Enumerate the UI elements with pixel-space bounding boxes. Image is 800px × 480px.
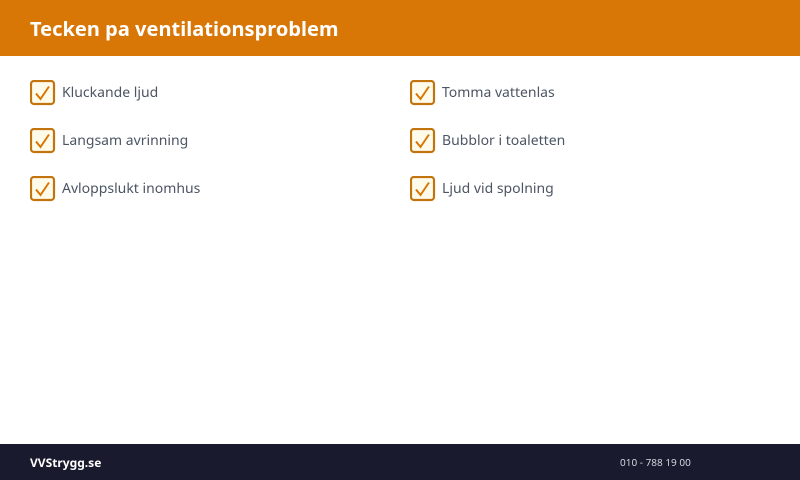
checklist item: Kluckande ljud: Kluckande ljud bbox=[62, 83, 158, 102]
checklist item: Tomma vattenlas bbox=[410, 80, 555, 106]
checklist item: Bubblor i toaletten: Bubblor i toaletten bbox=[442, 131, 565, 150]
checklist item: Ljud vid spolning: Ljud vid spolning bbox=[442, 179, 554, 198]
phone number: 010 - 788 19 00 bbox=[620, 455, 691, 469]
header band bbox=[0, 0, 800, 56]
title: Tecken pa ventilationsproblem bbox=[30, 15, 339, 42]
brand name: VVStrygg.se bbox=[30, 454, 101, 471]
checklist item: Langsam avrinning: Langsam avrinning bbox=[62, 131, 188, 150]
checklist item: Langsam avrinning bbox=[30, 128, 188, 154]
checklist item: Ljud vid spolning bbox=[410, 176, 554, 202]
checklist item: Bubblor i toaletten bbox=[410, 128, 565, 154]
checklist item: Tomma vattenlas: Tomma vattenlas bbox=[442, 83, 555, 102]
checklist item: Avloppslukt inomhus: Avloppslukt inomhus bbox=[62, 179, 200, 198]
checklist item: Avloppslukt inomhus bbox=[30, 176, 200, 202]
footer band bbox=[0, 444, 800, 480]
checklist item: Kluckande ljud bbox=[30, 80, 158, 106]
